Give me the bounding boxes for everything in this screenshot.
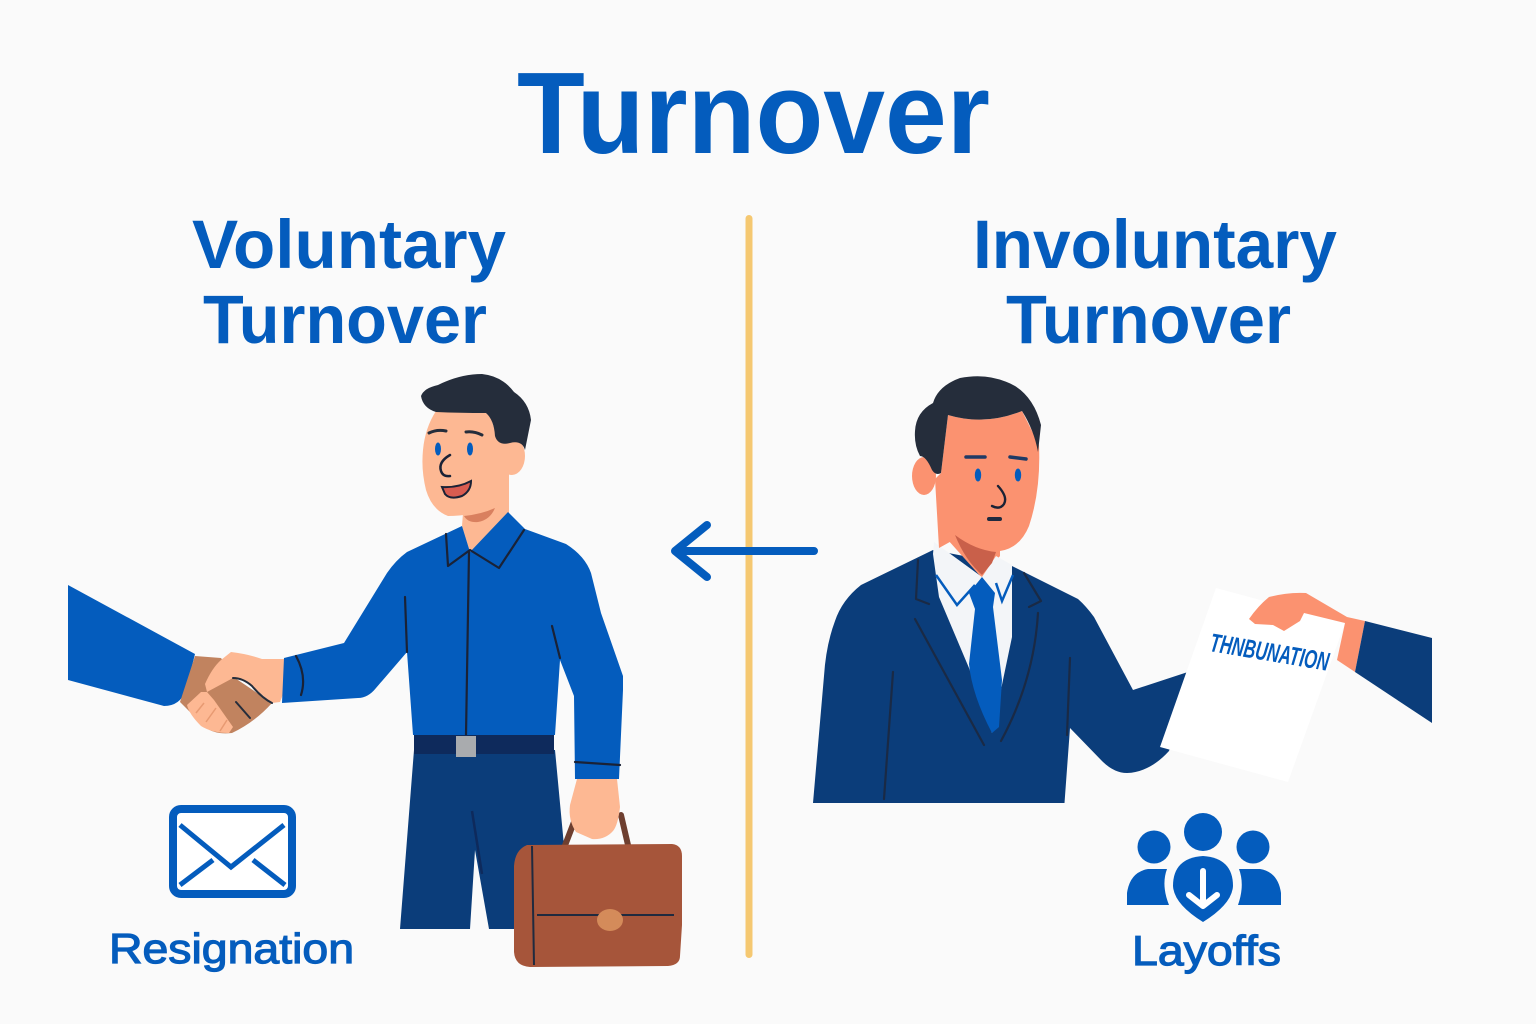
face: [422, 411, 510, 516]
label: resignation: Resignation: [109, 925, 354, 972]
neck fill: [939, 530, 1000, 578]
neck shadow: [955, 535, 996, 575]
title: Turnover: [517, 48, 990, 178]
heading: voluntary turnover: Turnover: [203, 281, 487, 358]
shirt: [933, 542, 1012, 733]
ear: [912, 457, 936, 495]
illustration: employee receiving termination notice: [813, 376, 1432, 803]
heading: voluntary turnover: [192, 206, 506, 358]
tie: [969, 577, 1002, 733]
hair: [915, 376, 1041, 474]
ear: [499, 437, 525, 475]
carrying hand: [570, 779, 620, 839]
hair: [421, 374, 531, 450]
shirt: [282, 512, 623, 779]
jacket lapel lines: [884, 560, 1070, 799]
center divider: [746, 215, 752, 958]
face features: [429, 430, 482, 498]
neck: [462, 470, 509, 552]
face features: [966, 457, 1026, 519]
neck and face: [935, 411, 1039, 551]
collar edge: [936, 575, 1013, 605]
jacket: [813, 550, 1200, 803]
label: layoffs: Layoffs: [1132, 927, 1281, 974]
heading: voluntary turnover: Voluntary: [192, 206, 506, 283]
neck shadow: [464, 508, 495, 522]
termination document: THNBUNATION: [1208, 627, 1332, 677]
pants: [400, 750, 566, 929]
other person's sleeve: [1355, 621, 1432, 723]
arrow pointing left: [675, 525, 814, 577]
briefcase handle: [564, 815, 628, 848]
heading: involuntary turnover: [973, 206, 1337, 358]
shirt seams: [296, 530, 620, 765]
termination document: [1160, 588, 1345, 782]
icon: layoffs group: [1127, 813, 1281, 922]
belt buckle: [456, 736, 476, 757]
hand holding document: [1249, 593, 1365, 672]
briefcase: [514, 844, 682, 967]
illustration: departing employee shaking hands: [68, 374, 682, 967]
handshake: [180, 652, 286, 733]
heading: involuntary turnover: Involuntary: [973, 206, 1337, 283]
other person's sleeve: [68, 585, 195, 706]
belt: [414, 735, 554, 754]
icon: envelope: [173, 809, 292, 894]
heading: involuntary turnover: Turnover: [1006, 281, 1291, 358]
